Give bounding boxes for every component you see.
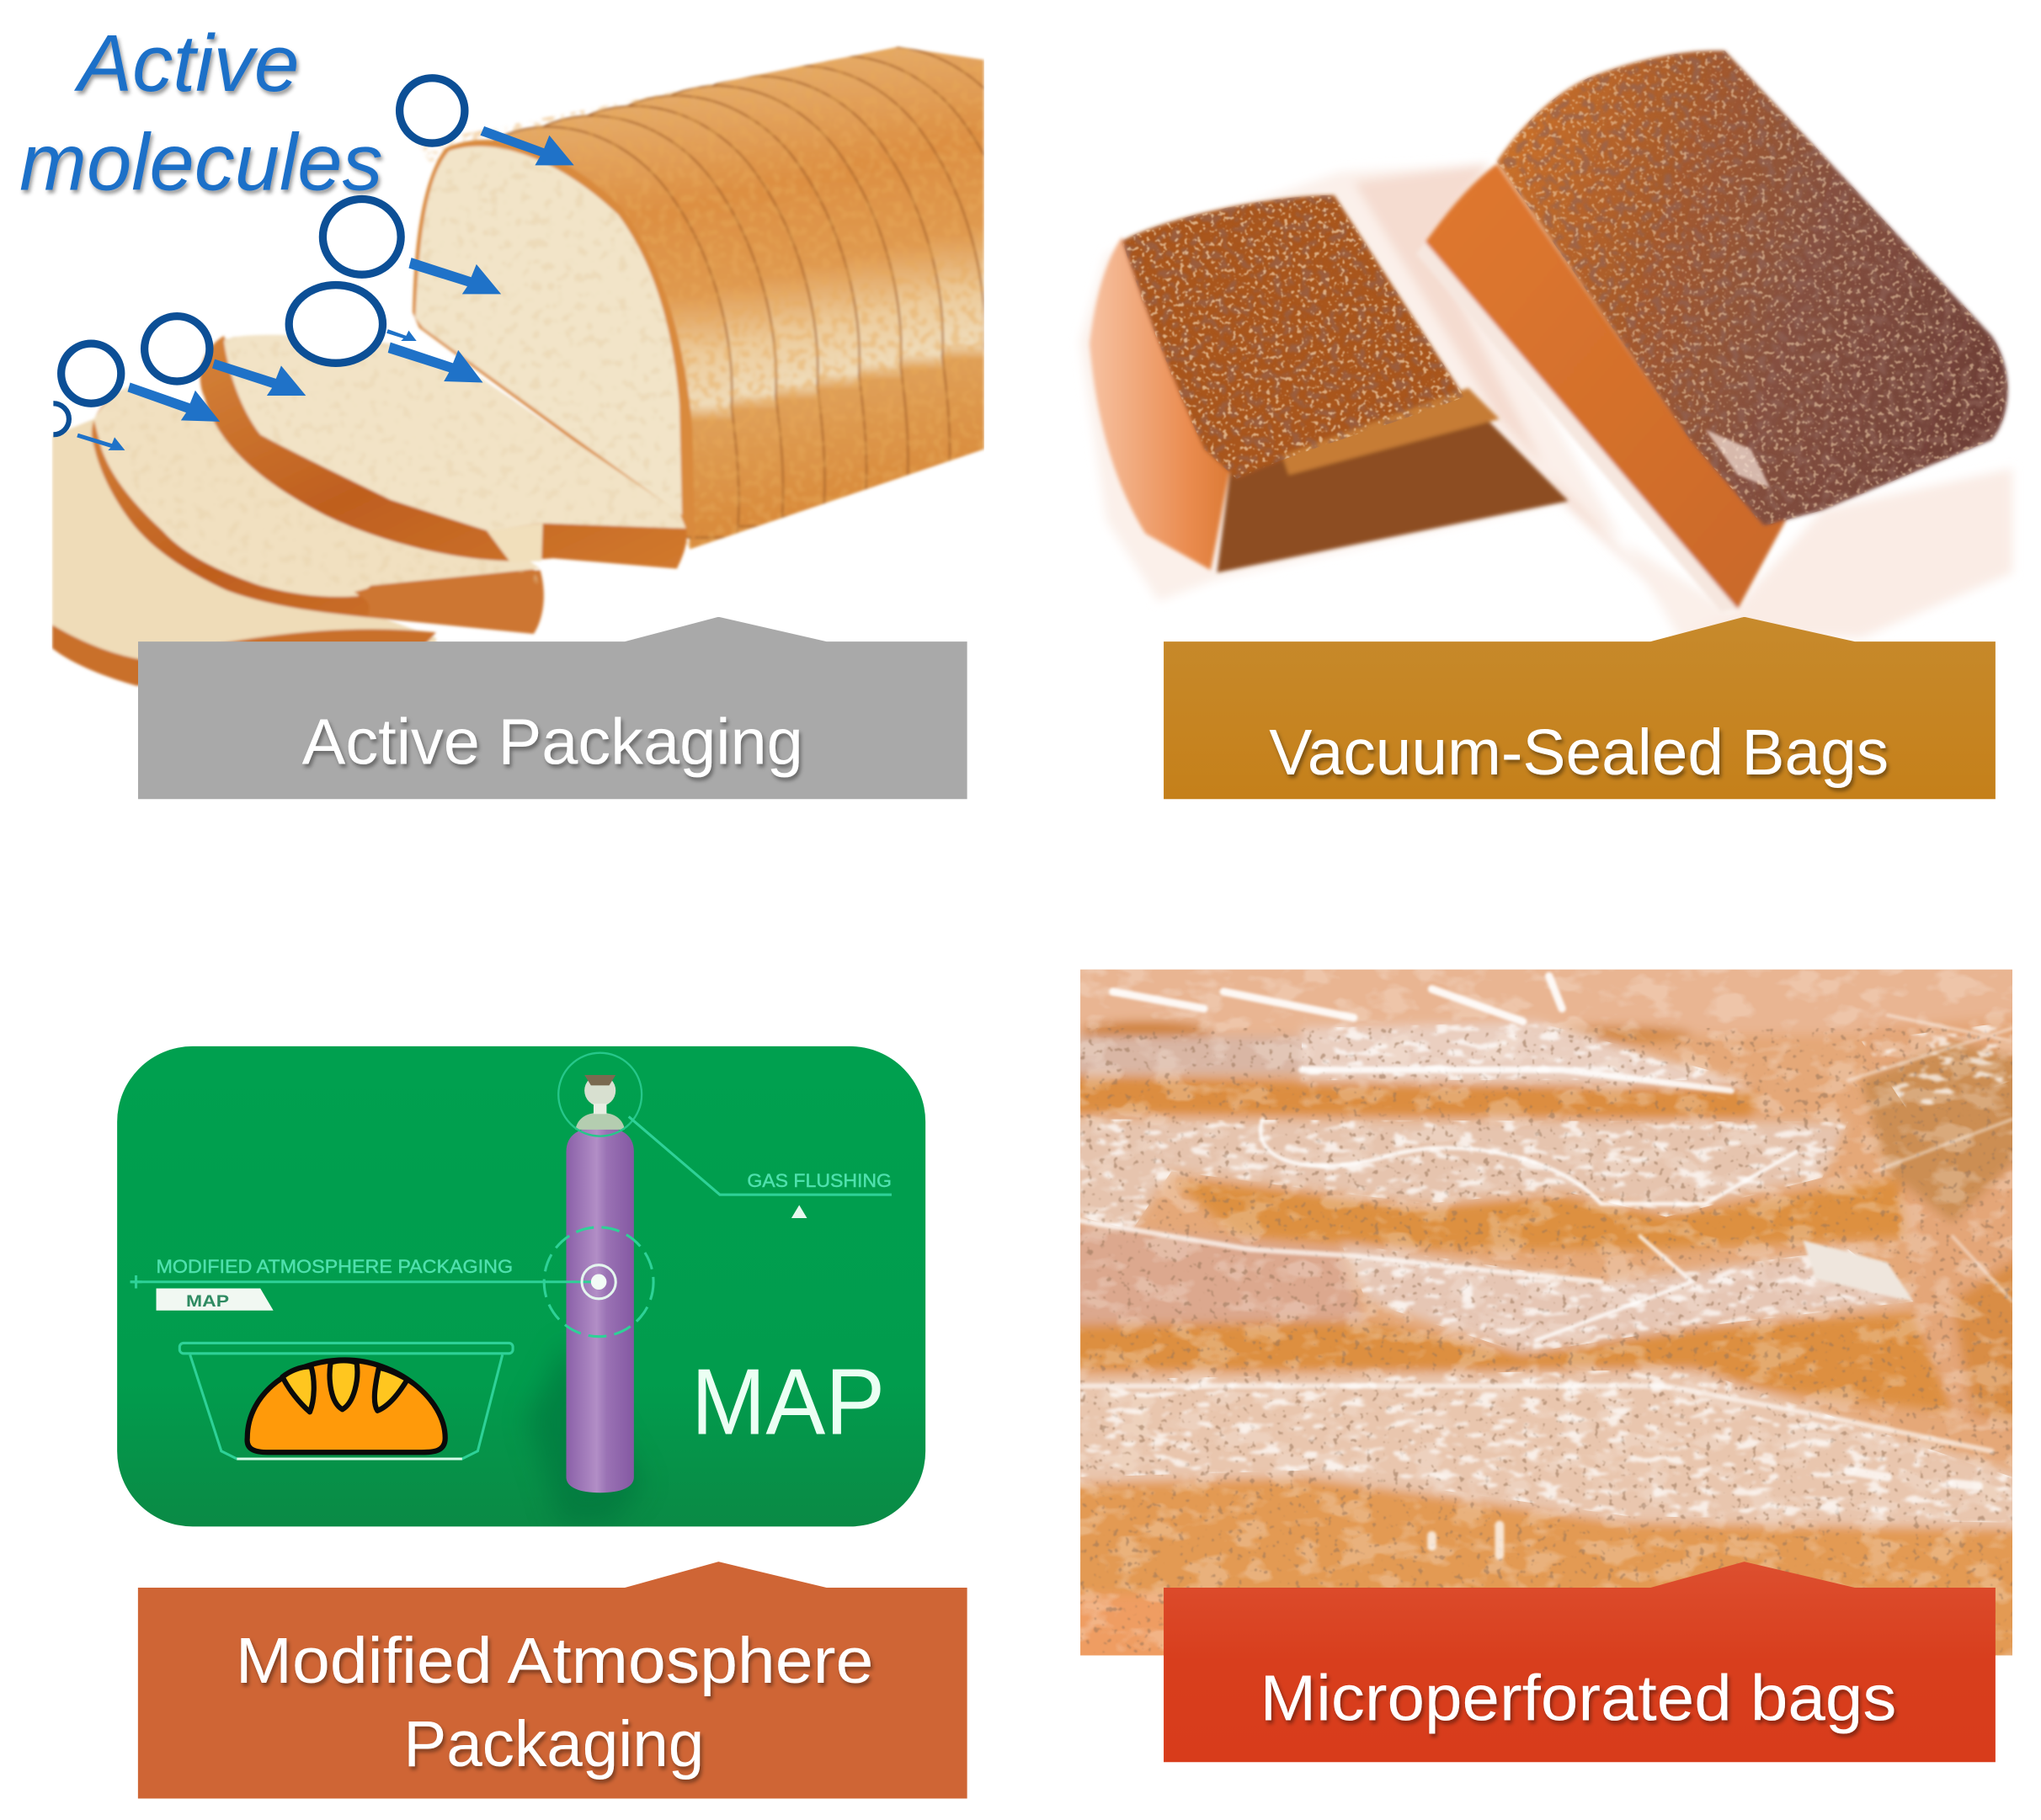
panel: active packaging — [19, 19, 1116, 799]
bread loaf illustration — [52, 45, 984, 689]
big MAP text: MAP — [691, 1349, 885, 1455]
label: vacuum-sealed bags — [1164, 617, 1996, 799]
caption: active molecules: molecules — [19, 118, 382, 208]
label: active packaging — [138, 617, 967, 799]
photo: vacuum sealed loaves — [1080, 45, 2017, 638]
gas cylinder — [558, 1053, 642, 1493]
modified atmosphere heading: MODIFIED ATMOSPHERE PACKAGING — [157, 1256, 513, 1277]
label: microperforated bags: Microperforated bags — [1260, 1663, 1896, 1735]
label: modified atmosphere packaging: Packaging — [403, 1708, 704, 1780]
active molecule circles — [53, 78, 465, 434]
panel: vacuum-sealed bags — [1080, 45, 2017, 799]
green MAP illustration — [117, 1046, 925, 1526]
panel: microperforated bags — [1068, 956, 2031, 1762]
plastic film streaks — [1080, 976, 2012, 1626]
leader lines — [131, 1116, 892, 1337]
label: modified atmosphere packaging — [138, 1562, 967, 1798]
target dot — [591, 1274, 606, 1290]
caption: active molecules — [19, 19, 382, 208]
tray outline — [179, 1343, 513, 1459]
map tag — [157, 1288, 274, 1311]
label: microperforated bags — [1164, 1562, 1996, 1762]
label: active packaging: Active Packaging — [302, 705, 803, 778]
caption: active molecules: Active — [74, 19, 300, 109]
panel: modified atmosphere packaging — [117, 1046, 967, 1798]
photo: bagged bread rolls — [1068, 956, 2031, 1666]
map tag: MAP — [186, 1293, 229, 1311]
plastic crinkle highlights — [1080, 1022, 2012, 1522]
diffusion arrows — [77, 126, 574, 450]
bread icon — [248, 1360, 445, 1452]
bag tag — [1803, 1240, 1913, 1301]
gas flushing label: GAS FLUSHING — [747, 1170, 892, 1191]
label: modified atmosphere packaging: Modified Atmosphere — [236, 1625, 873, 1697]
small triangle — [791, 1205, 807, 1218]
label: vacuum-sealed bags: Vacuum-Sealed Bags — [1269, 716, 1889, 789]
